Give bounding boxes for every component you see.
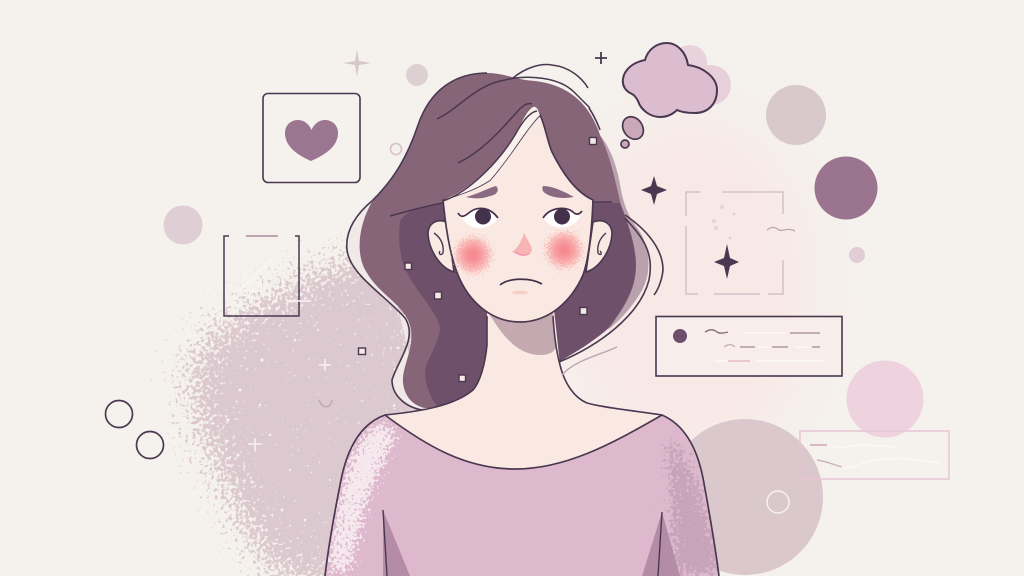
info card <box>656 316 842 376</box>
shirt outline <box>325 415 719 576</box>
nose tip <box>516 252 530 255</box>
faint hair strand <box>562 347 617 375</box>
right ear <box>586 221 612 272</box>
background wash: pink tint right <box>570 120 810 460</box>
small arc mark <box>319 400 332 407</box>
mouth <box>500 279 542 285</box>
sparkle: dark beside head <box>641 176 667 205</box>
hair squares <box>358 138 596 382</box>
small plus marks on splash <box>248 359 331 451</box>
shirt speckles <box>326 418 725 576</box>
decorative white specks on splash <box>226 329 341 546</box>
thought bubbles <box>618 113 648 148</box>
circle: top right pale <box>766 85 826 145</box>
left eyebrow <box>466 186 498 198</box>
circle: plum <box>814 156 878 220</box>
sparkle: star in card <box>714 244 739 279</box>
left eye <box>458 208 498 228</box>
hair outline right side <box>559 108 650 362</box>
heart card <box>263 94 360 182</box>
hair strand lines <box>390 65 612 216</box>
lower lip <box>512 291 528 294</box>
speckled splash: left <box>184 250 430 576</box>
right cheek speckle <box>544 230 584 270</box>
circle: pink right <box>846 360 924 438</box>
circle: pale top <box>406 64 428 86</box>
plus: dark <box>595 52 607 64</box>
hair <box>360 73 648 408</box>
neck and chest <box>385 300 662 469</box>
circle: large mauve lower right <box>667 419 823 575</box>
right ear detail <box>598 233 606 254</box>
rings: lower left <box>106 400 164 458</box>
sparkle: pale top <box>343 50 371 77</box>
circle: small right <box>849 247 865 263</box>
right eyebrow <box>542 186 574 198</box>
face <box>443 115 593 322</box>
faint dots in card <box>712 205 736 240</box>
squiggle <box>767 227 795 231</box>
shirt inner lines <box>383 510 662 576</box>
left cheek blush <box>462 244 484 266</box>
white hair streak <box>443 107 540 200</box>
thought cloud <box>623 43 731 117</box>
nose <box>512 233 532 255</box>
ring: small pink <box>390 144 402 154</box>
shirt <box>325 415 719 576</box>
left cheek speckle <box>453 235 493 275</box>
ring: white in mauve circle <box>767 491 789 513</box>
back hair strand <box>347 200 422 410</box>
left ear <box>428 221 454 272</box>
pink outlined card <box>800 431 949 479</box>
hair strand right <box>625 215 663 295</box>
right cheek blush <box>553 239 575 261</box>
dashed card: left <box>224 236 311 316</box>
icon: heart <box>285 120 338 161</box>
right eye <box>543 208 582 228</box>
woman figure <box>325 65 725 576</box>
dashed card: right with star <box>686 192 795 294</box>
text lines <box>705 330 824 361</box>
neck shadow <box>490 310 556 355</box>
left ear detail <box>434 233 443 254</box>
dot <box>673 329 687 343</box>
hair shadow <box>399 203 636 410</box>
hair light band <box>600 135 648 330</box>
circle: left pale <box>164 206 202 244</box>
neck outline <box>385 316 662 415</box>
hair outline left <box>373 73 487 200</box>
